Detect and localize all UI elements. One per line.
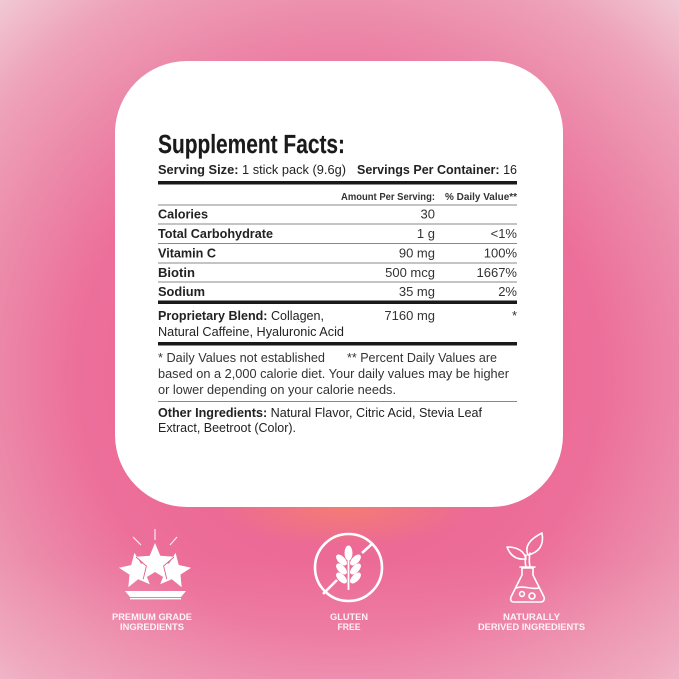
other ingredients: Other Ingredients: Natural Flavor, Citric Acid, Stevia Leaf: [158, 405, 482, 420]
servings per container: Servings Per Container: 16: [357, 162, 517, 177]
footnote: [158, 350, 510, 397]
footnote: based on a 2,000 calorie diet. Your daily values may be higher: [158, 366, 510, 381]
row: sodium: 35 mg: [399, 284, 435, 299]
icon: premium grade stars: [117, 529, 193, 599]
row: sodium: 2%: [498, 284, 517, 299]
row: calories: Calories: [158, 206, 208, 222]
footnote: * Daily Values not established: [158, 350, 325, 365]
row: biotin: Biotin: [158, 265, 195, 280]
row: total carbohydrate: 1 g: [417, 226, 435, 241]
label: naturally derived ingredients: [478, 612, 585, 632]
label: gluten free: GLUTEN: [330, 612, 368, 622]
column header: percent daily value: % Daily Value**: [445, 192, 517, 203]
other ingredients: [158, 405, 482, 435]
row: biotin: 500 mcg: [385, 265, 435, 280]
icon: flask with plant: [507, 533, 544, 602]
row: total carbohydrate: Total Carbohydrate: [158, 226, 273, 241]
row: vitamin c: [158, 246, 517, 260]
footnote: or lower depending on your calorie needs.: [158, 382, 396, 397]
row: biotin: 1667%: [477, 265, 517, 280]
row: sodium: [158, 284, 517, 299]
row: proprietary blend: [158, 308, 517, 339]
label: premium grade ingredients: INGREDIENTS: [120, 622, 184, 632]
icon: gluten free: [315, 534, 382, 601]
footnote: ** Percent Daily Values are: [347, 350, 497, 365]
other ingredients: Extract, Beetroot (Color).: [158, 420, 296, 435]
row: biotin: [158, 265, 517, 280]
row: calories: 30: [421, 206, 435, 222]
serving size: Serving Size: 1 stick pack (9.6g): [158, 162, 346, 177]
row: total carbohydrate: [158, 226, 517, 241]
row: sodium: Sodium: [158, 284, 205, 299]
row: vitamin c: 100%: [484, 246, 517, 260]
column header: amount per serving: Amount Per Serving:: [341, 192, 435, 203]
row: vitamin c: 90 mg: [399, 246, 435, 260]
label: premium grade ingredients: PREMIUM GRADE: [112, 612, 192, 622]
row: vitamin c: Vitamin C: [158, 246, 217, 260]
label: premium grade ingredients: [112, 612, 192, 632]
label: gluten free: FREE: [338, 622, 360, 632]
label: naturally derived ingredients: DERIVED INGREDIENTS: [478, 622, 585, 632]
panel: supplement facts card: [115, 61, 563, 507]
row: proprietary blend: *: [512, 308, 517, 323]
label: naturally derived ingredients: NATURALLY: [503, 612, 560, 622]
label: gluten free: [330, 612, 368, 632]
row: calories: [158, 206, 435, 222]
heading: supplement facts: Supplement Facts:: [158, 131, 345, 159]
row: proprietary blend: Natural Caffeine, Hyaluronic Acid: [158, 324, 344, 339]
row: proprietary blend: 7160 mg: [384, 308, 435, 323]
row: proprietary blend: Proprietary Blend: Collagen,: [158, 308, 324, 323]
row: total carbohydrate: <1%: [491, 226, 517, 241]
